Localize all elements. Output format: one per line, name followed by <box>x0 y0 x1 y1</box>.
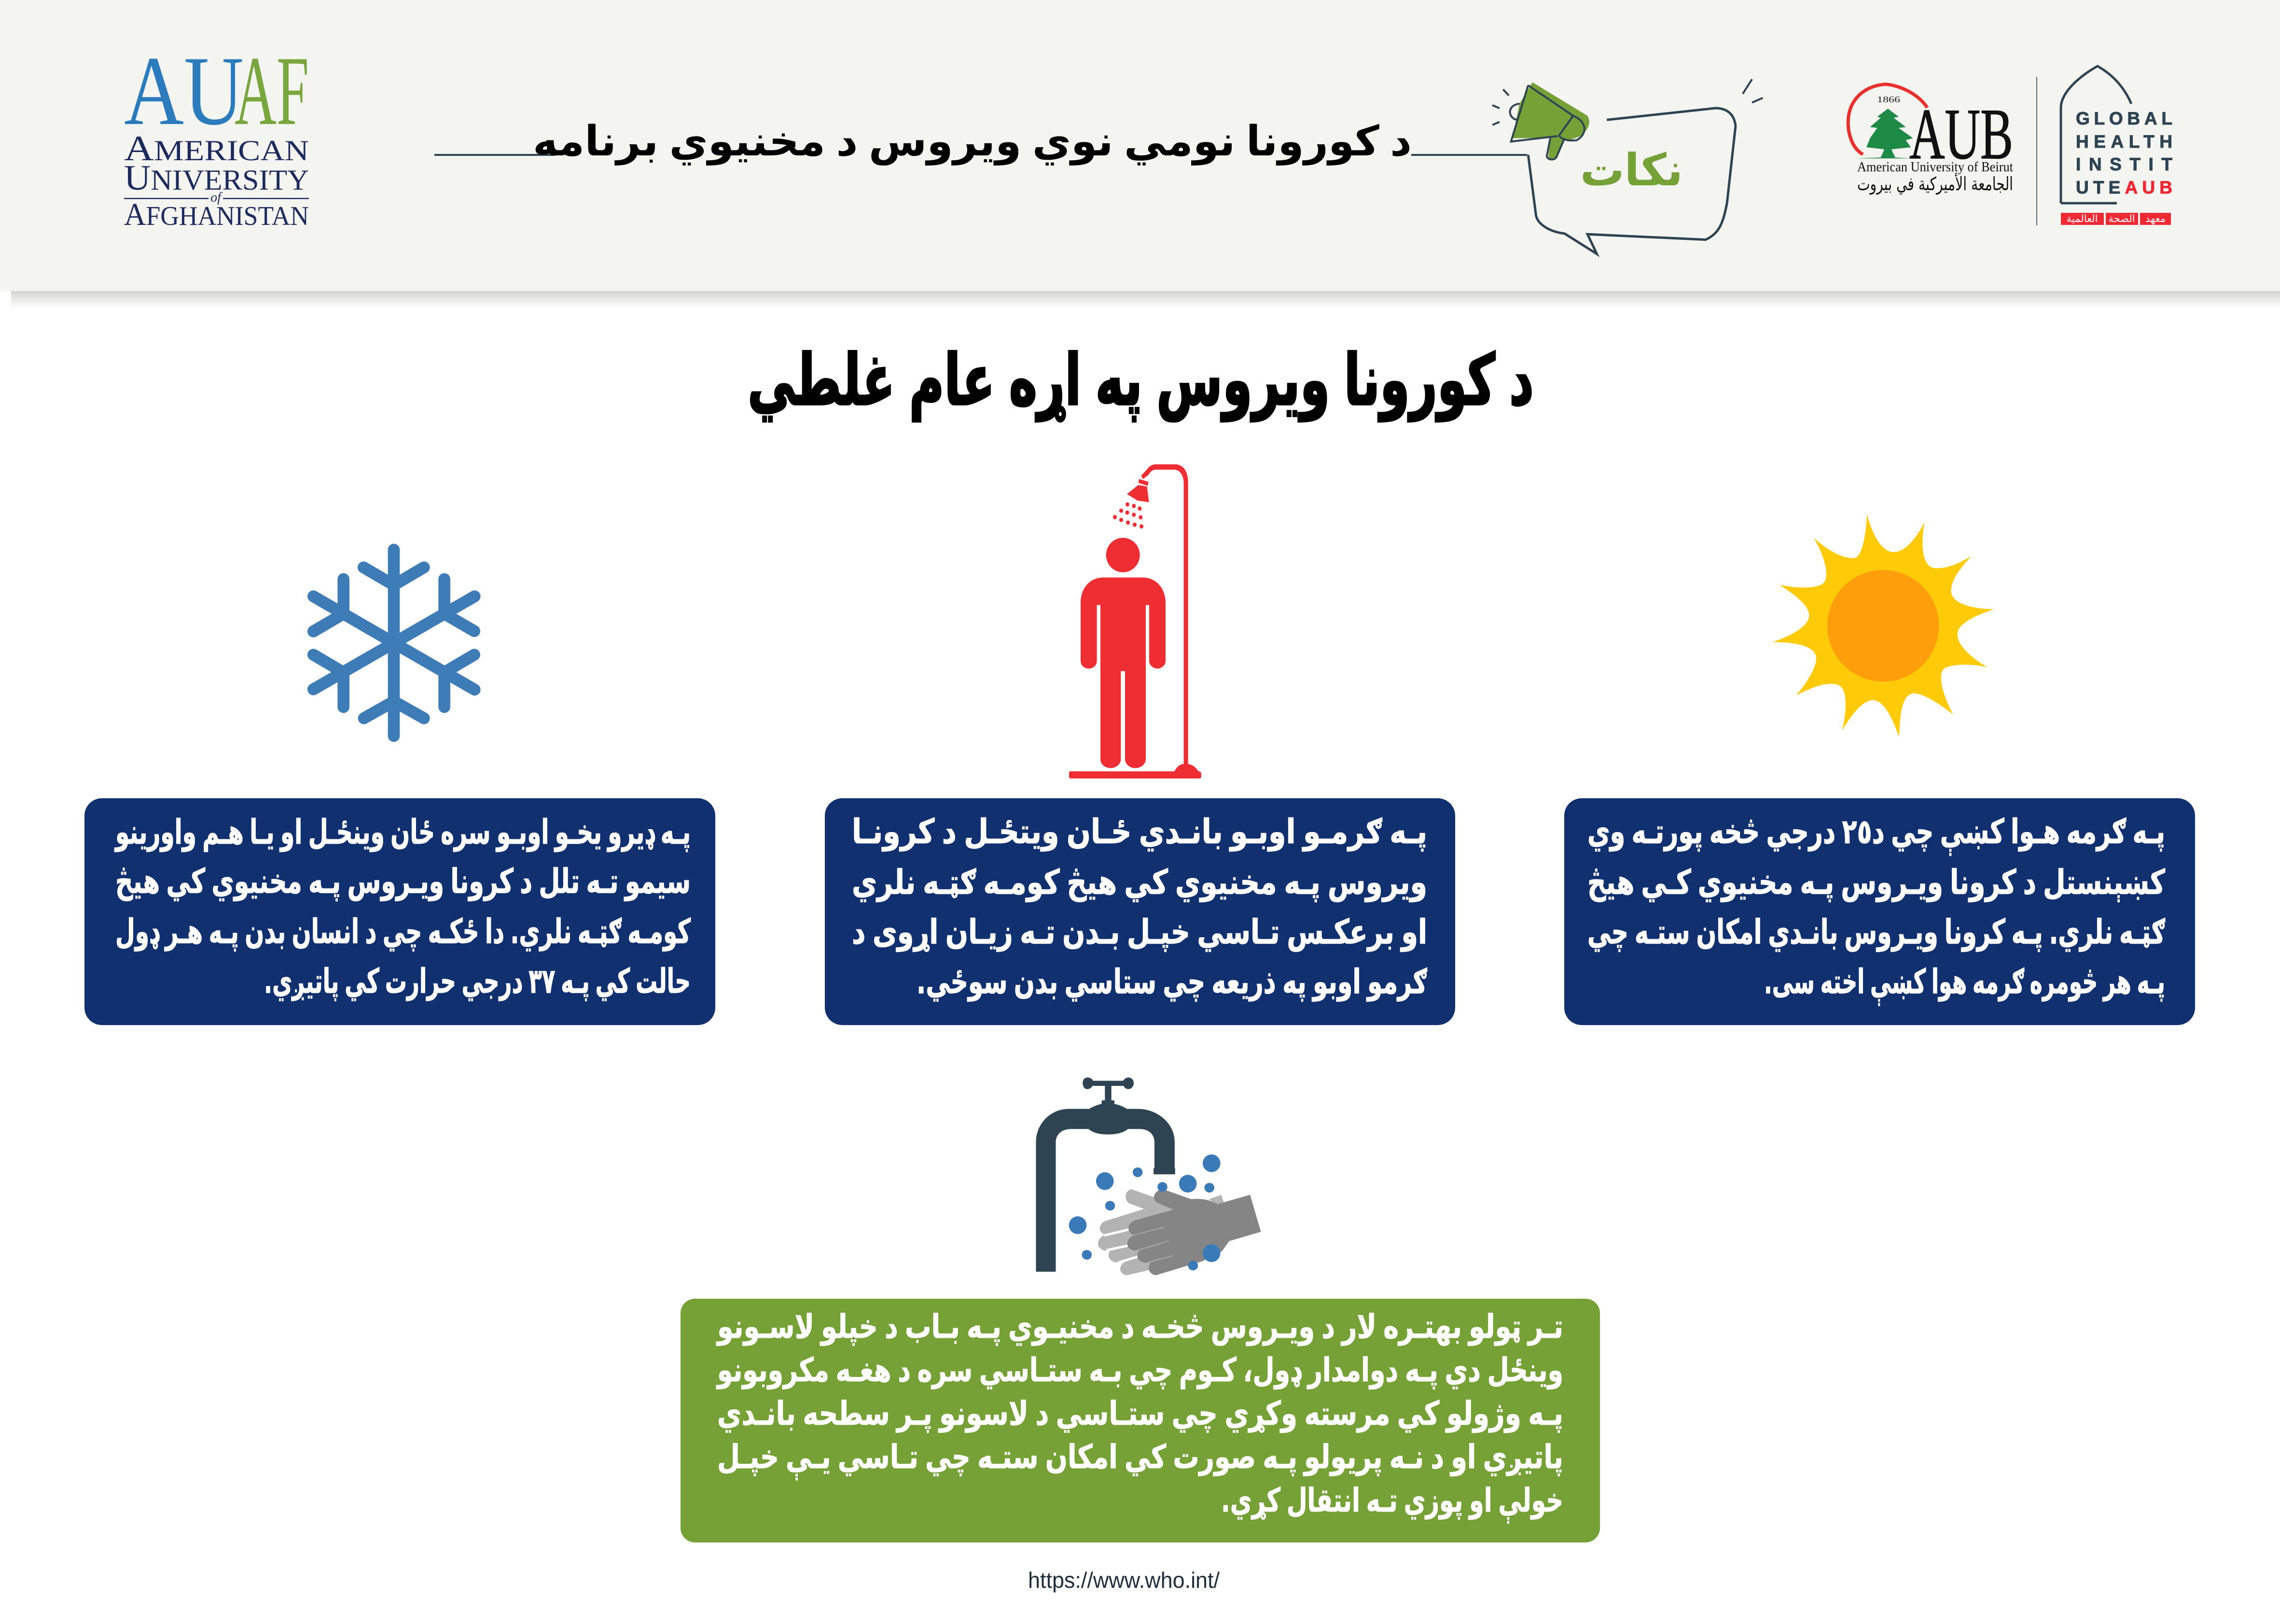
panel: hot shower <box>825 798 1455 1025</box>
panel text <box>716 1308 1563 1524</box>
panel text <box>114 812 691 1001</box>
panel text: حالت کي پـه ٣٧ درجي حرارت کي پاتیږي. <box>264 961 691 1001</box>
tap <box>1036 1078 1175 1272</box>
source link: https://www.who.int/ <box>1028 1568 1220 1593</box>
icon: snowflake <box>313 550 474 736</box>
panel text: تـر ټولو بهتـره لار د ویـروس څخـه د مخنیـوي پـه بـاب د خپلو لاسـونو <box>716 1308 1563 1346</box>
speech bubble outline <box>1528 108 1736 254</box>
main title: د کورونا ویروس په اړه عام غلطي <box>748 339 1534 422</box>
tips label: نکات <box>1580 144 1683 196</box>
logo: Global Health Institute AUB: INSTIT <box>2076 154 2172 174</box>
logo: American University of Afghanistan: AF <box>235 36 309 146</box>
panel: cold water and snow <box>84 798 715 1025</box>
back hand <box>1098 1189 1224 1275</box>
logo: American University of Afghanistan: AFGHANISTAN <box>124 197 309 232</box>
logo: American University of Afghanistan: UNIVERSITY <box>124 158 309 198</box>
header title line: د کورونا نومي نوي ویروس د مخنیوي برنامه <box>533 117 1412 166</box>
logo: Global Health Institute AUB: GLOBAL <box>2076 109 2172 128</box>
logo: Global Health Institute AUB: العالمية <box>2067 213 2098 224</box>
icon: megaphone <box>1510 82 1589 159</box>
panel text: پـه ګرمه هـوا کښې چي د٢٥ درجي څخه پورتـه وي <box>1587 812 2165 856</box>
logo: American University of Beirut: 1866 <box>1877 95 1900 104</box>
icon: hand washing under tap <box>1036 1078 1261 1275</box>
logo: American University of Beirut: الجامعة الأميركية في بيروت <box>1857 172 2013 195</box>
panel: hot climate <box>1564 798 2195 1025</box>
water drops <box>1113 502 1143 528</box>
logo: Global Health Institute AUB: معهد <box>2145 213 2166 224</box>
panel text: ګرمو اوبو په ذریعه چي ستاسي بدن سوځي. <box>917 962 1427 1002</box>
panel: hand washing advice <box>681 1299 1600 1542</box>
logo: Global Health Institute AUB: الصحة <box>2108 213 2135 224</box>
icon: person under hot shower <box>1069 464 1201 778</box>
icon: sun <box>1772 514 1994 737</box>
sparks <box>1492 79 1763 125</box>
panel text <box>852 812 1427 1002</box>
panel text <box>1587 812 2165 1006</box>
logo: Global Health Institute AUB: HEALTH <box>2076 132 2172 152</box>
front hand <box>1127 1190 1261 1275</box>
panel text: پـه ګرمـو اوبـو بانـدي ځـان ویتځـل د کرونـا <box>852 812 1427 852</box>
panel text: پـه ډیرو یخـو اوبـو سره ځان وینځـل او یـا هـم واورینو <box>114 812 691 852</box>
logo: American University of Afghanistan: AMERICAN <box>124 129 309 168</box>
logo: American University of Beirut: AUB <box>1909 94 2013 174</box>
shower pole and head <box>1141 464 1188 768</box>
panel text: او برعکـس تـاسي خپـل بـدن تـه زیـان اړوی د <box>852 912 1427 952</box>
logo: Global Health Institute AUB: UTEAUB <box>2076 178 2172 197</box>
panel text: پـه وژولو کي مرسته وکړي چي ستـاسي د لاسونو پـر سطحه بانـدي <box>717 1395 1563 1433</box>
logo: American University of Afghanistan <box>124 36 309 232</box>
speech bubble with megaphone <box>1492 79 1763 254</box>
panel text: پاتیږي او د نـه پریولو پـه صورت کي امکان ستـه چي تـاسي یـې خپـل <box>717 1438 1563 1480</box>
soap bubbles <box>1069 1154 1221 1270</box>
logo divider <box>2036 77 2037 225</box>
logo: American University of Beirut <box>1848 84 2013 195</box>
base <box>1069 764 1201 778</box>
panel text: کومـه ګټـه نلري. دا ځکـه چي د انسان بدن پـه هـر ډول <box>115 912 691 952</box>
logo: Global Health Institute AUB <box>2061 66 2172 225</box>
panel text: خولې او پوزي تـه انتقال کړي. <box>1221 1482 1563 1524</box>
panel text: ویروس پـه مخنیوي کي هیڅ کومـه ګټـه نلري <box>852 862 1427 902</box>
header band <box>0 0 2280 308</box>
person <box>1081 538 1166 768</box>
logo: American University of Afghanistan: of <box>210 190 222 205</box>
panel text: وینځل دي پـه دوامدار ډول، کـوم چي بـه ستـاسي سره د هغـه مکروبونو <box>716 1351 1563 1389</box>
panel text: سیمو تـه تلل د کرونا ویـروس پـه مخنیوي کي هیڅ <box>115 861 691 902</box>
logo: American University of Beirut: American University of Beirut <box>1857 160 2013 175</box>
logo: American University of Afghanistan: AU <box>124 36 244 146</box>
